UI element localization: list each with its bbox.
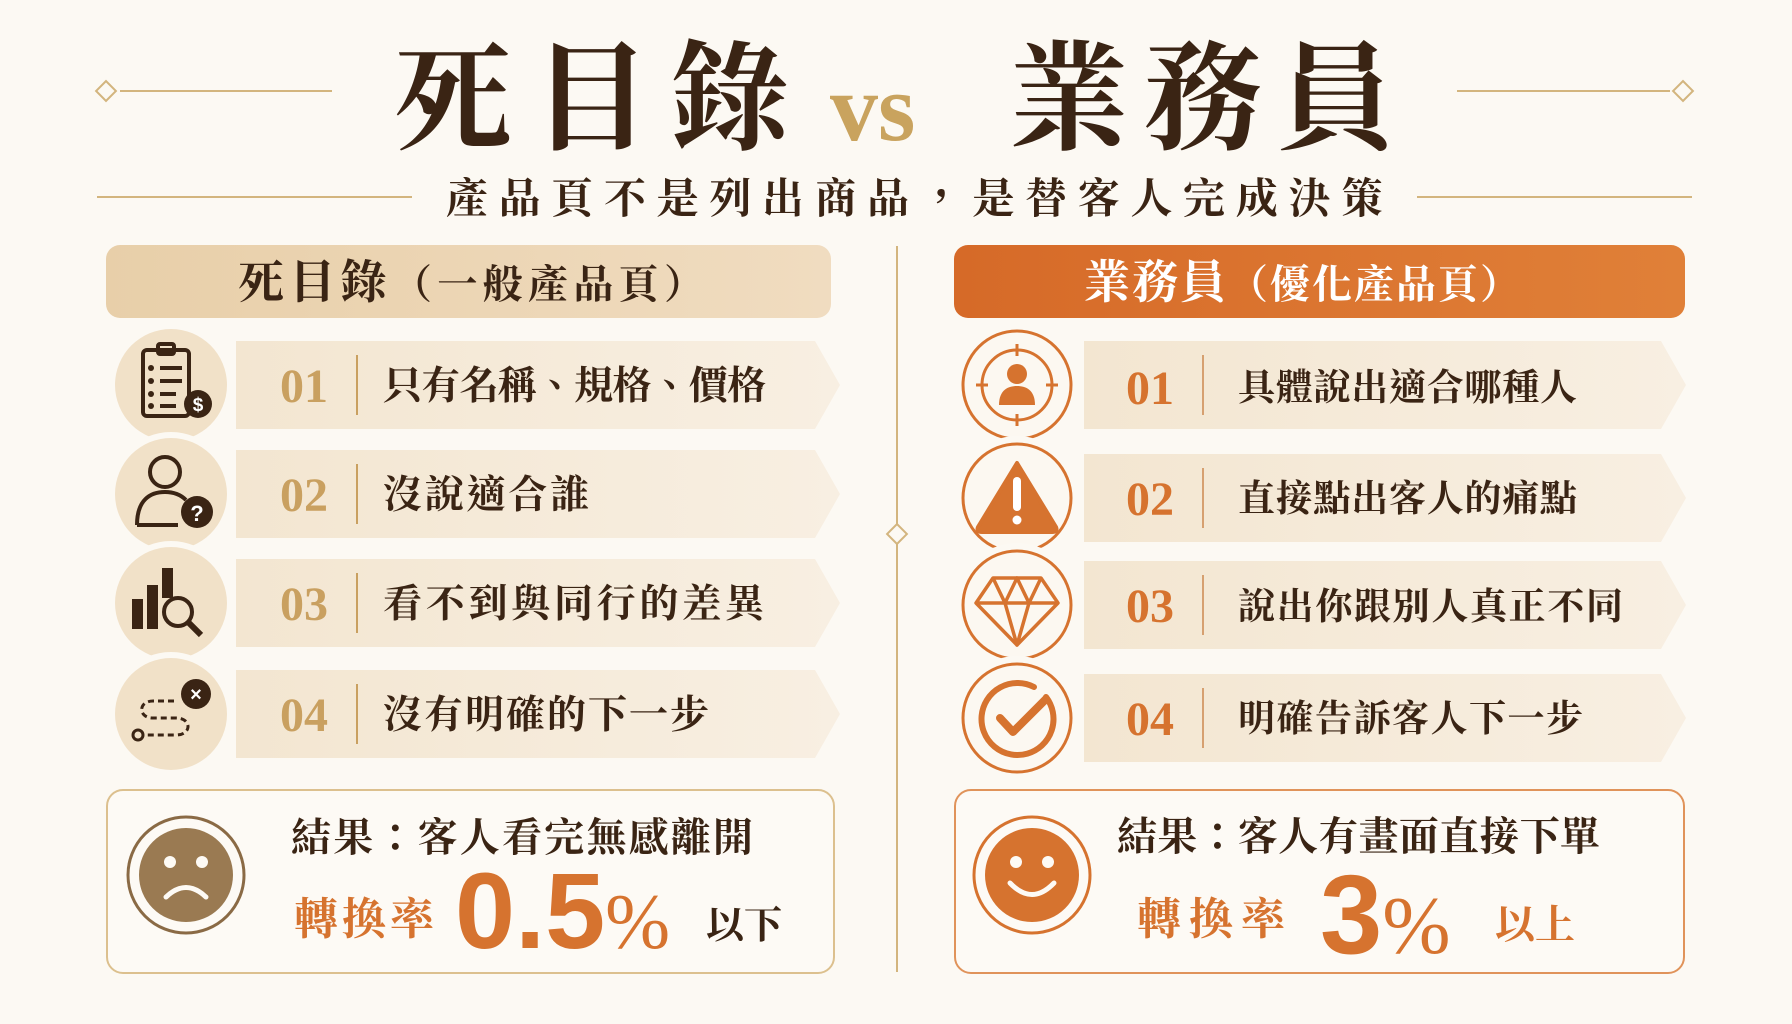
result box: right: 以上 bbox=[1495, 902, 1575, 947]
icon: sad face bbox=[128, 817, 244, 933]
title: 死目錄 bbox=[394, 35, 794, 166]
row L4: 沒有明確的下一步 bbox=[383, 694, 709, 737]
panel header: right bbox=[954, 245, 1685, 318]
row L1: 01 bbox=[280, 360, 328, 413]
row L2 bbox=[109, 432, 840, 556]
result box: left bbox=[107, 790, 834, 973]
title side ornaments bbox=[96, 81, 1693, 197]
icon: smiley bbox=[974, 817, 1090, 933]
result box: left: 結果：客人看完無感離開 bbox=[291, 815, 753, 860]
center divider bbox=[887, 246, 907, 972]
row R3 bbox=[955, 543, 1686, 667]
result box: left: 以下 bbox=[706, 905, 783, 947]
result box: left: 轉換率 bbox=[294, 895, 435, 944]
row R2: 02 bbox=[1126, 473, 1174, 526]
row R4: 明確告訴客人下一步 bbox=[1238, 698, 1583, 740]
panel header: left bbox=[106, 245, 831, 318]
row L2: 沒說適合誰 bbox=[383, 474, 589, 517]
result box: right: 結果：客人有畫面直接下單 bbox=[1117, 814, 1600, 859]
result box: right bbox=[955, 790, 1684, 977]
row L4: 04 bbox=[280, 689, 328, 742]
row L1: 只有名稱、規格、價格 bbox=[383, 365, 766, 408]
row R3: 03 bbox=[1126, 580, 1174, 633]
row R2 bbox=[955, 436, 1686, 560]
left list bbox=[109, 323, 840, 776]
row R1: 01 bbox=[1126, 362, 1174, 415]
row L4: × bbox=[190, 684, 202, 706]
title: vs bbox=[830, 54, 915, 161]
row L1 bbox=[109, 323, 840, 447]
panel header: right: 業務員（優化產品頁） bbox=[1084, 257, 1520, 308]
subtitle: 產品頁不是列出商品，是替客人完成決策 bbox=[446, 176, 1383, 223]
row L2: ? bbox=[190, 501, 204, 526]
row L1: $ bbox=[193, 395, 204, 416]
row R1: 具體說出適合哪種人 bbox=[1238, 367, 1577, 409]
row L3: 03 bbox=[280, 578, 328, 631]
title: 業務員 bbox=[1010, 35, 1395, 166]
result box: left: 0.5% bbox=[455, 850, 670, 971]
row R4: 04 bbox=[1126, 693, 1174, 746]
row R3: 說出你跟別人真正不同 bbox=[1238, 586, 1623, 628]
row R1 bbox=[955, 323, 1686, 447]
row L3: 看不到與同行的差異 bbox=[383, 583, 769, 626]
title bbox=[394, 35, 1395, 166]
row R4 bbox=[955, 656, 1686, 780]
row L2: 02 bbox=[280, 469, 328, 522]
result box: right: 轉換率 bbox=[1137, 895, 1286, 944]
panel header: left: 死目錄（一般產品頁） bbox=[238, 257, 704, 308]
row R2: 直接點出客人的痛點 bbox=[1238, 478, 1577, 520]
right list bbox=[955, 323, 1686, 780]
row L3 bbox=[109, 541, 840, 665]
row L4 bbox=[109, 652, 840, 776]
result box: right: 3% bbox=[1320, 852, 1451, 977]
